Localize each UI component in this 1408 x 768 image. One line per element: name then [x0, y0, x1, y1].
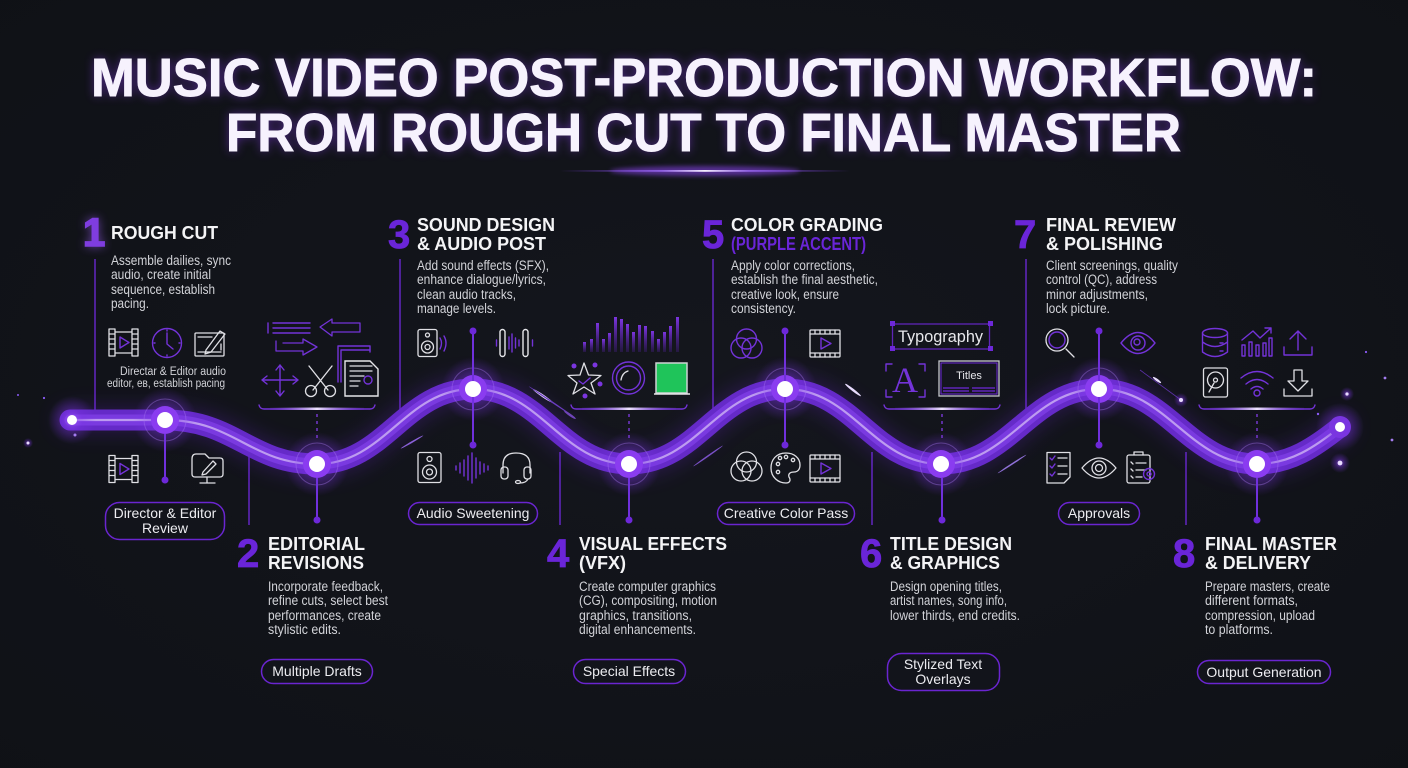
- heading: [579, 534, 727, 573]
- label pill: [408, 502, 538, 524]
- icon: lens ring: [612, 362, 644, 394]
- icon shelf: [259, 405, 375, 410]
- description: compression, upload: [1205, 608, 1315, 623]
- description: pacing.: [111, 296, 149, 311]
- step number 8: 8: [1173, 532, 1195, 576]
- panel: step 1 rough cut: [83, 211, 231, 540]
- icon: folder on monitor: [192, 454, 223, 483]
- icon caption: editor, eв, establish pacing: [107, 378, 225, 390]
- title: FROM ROUGH CUT TO FINAL MASTER: [226, 103, 1181, 163]
- label pill: Multiple Drafts: [272, 663, 362, 679]
- icon: film lower: [810, 455, 840, 482]
- step number 4: 4: [547, 532, 570, 576]
- timeline node 5: [753, 328, 817, 448]
- heading: & AUDIO POST: [417, 234, 546, 254]
- description: performances, create: [268, 608, 381, 623]
- winding timeline path: [70, 389, 1340, 464]
- description: Client screenings, quality: [1046, 258, 1178, 273]
- icon: green screen: [654, 363, 690, 394]
- path start point: [48, 396, 96, 444]
- icon: star: [568, 362, 602, 398]
- icon: wifi: [1241, 372, 1273, 396]
- dotted connector: [941, 414, 943, 440]
- description: refine cuts, select best: [268, 593, 388, 608]
- timeline node 8: [1225, 432, 1289, 524]
- heading: [1046, 215, 1176, 254]
- dotted connector: [1256, 414, 1258, 440]
- heading: COLOR GRADING: [731, 215, 883, 235]
- icon: speaker lower: [418, 452, 441, 482]
- description: [890, 579, 1020, 623]
- description: Assemble dailies, sync: [111, 253, 231, 268]
- description: digital enhancements.: [579, 622, 696, 637]
- label pill: [888, 654, 1000, 690]
- panel: step 3 sound design: [388, 213, 555, 524]
- label pill: Output Generation: [1206, 664, 1322, 680]
- description: different formats,: [1205, 593, 1298, 608]
- icon: growth chart: [1242, 328, 1272, 356]
- icon: waveform upper: [496, 330, 532, 356]
- icon: film strip lower: [109, 456, 138, 482]
- panel: step 8 final master: [1173, 432, 1337, 684]
- icon: download: [1284, 370, 1312, 396]
- timeline node 7: [1067, 328, 1131, 448]
- description: minor adjustments,: [1046, 287, 1148, 302]
- description: Prepare masters, create: [1205, 579, 1330, 594]
- icon: sound wave: [456, 453, 488, 483]
- icon: checklist: [1047, 452, 1070, 483]
- heading: [268, 534, 365, 573]
- icon: clipboard: [1127, 452, 1154, 483]
- description: [579, 579, 717, 637]
- step number 7: 7: [1014, 213, 1036, 257]
- heading: (PURPLE ACCENT): [731, 234, 866, 254]
- heading: SOUND DESIGN: [417, 215, 555, 235]
- description: [268, 579, 388, 637]
- label pill: Creative Color Pass: [724, 505, 848, 521]
- label pill: [718, 502, 854, 524]
- label pill: Director & Editor: [114, 505, 217, 521]
- description: stylistic edits.: [268, 622, 341, 637]
- heading: & POLISHING: [1046, 234, 1163, 254]
- icon: eye white: [1082, 458, 1116, 478]
- panel: step 5 color grading: [702, 213, 883, 524]
- description: establish the final aesthetic,: [731, 272, 878, 287]
- icon: titles card: Titles: [956, 370, 982, 382]
- sparkles: [17, 351, 1393, 474]
- panel: step 4 icons: [568, 317, 690, 440]
- connector lines from steps to the path: [95, 259, 1186, 525]
- heading: (VFX): [579, 553, 626, 573]
- icon: upload: [1284, 331, 1312, 355]
- timeline node 3: [441, 328, 505, 448]
- icon caption: Directar & Editor audio: [120, 366, 226, 378]
- description: Apply color corrections,: [731, 258, 855, 273]
- label pill: Special Effects: [583, 663, 675, 679]
- description: enhance dialogue/lyrics,: [417, 272, 546, 287]
- label pill: Overlays: [915, 671, 971, 687]
- title: MUSIC VIDEO POST-PRODUCTION WORKFLOW:: [91, 48, 1317, 108]
- heading: FINAL REVIEW: [1046, 215, 1176, 235]
- icon: timeline arrows: [262, 319, 360, 396]
- icon: typography box: Typography: [898, 327, 983, 346]
- description: to platforms.: [1205, 622, 1273, 637]
- icon: color wheels purple: [731, 329, 762, 358]
- label pill: Stylized Text: [904, 656, 982, 672]
- heading: [890, 534, 1012, 573]
- description: [111, 253, 231, 311]
- step number 1: 1: [83, 211, 105, 255]
- title: MUSIC VIDEO POST-PRODUCTION WORKFLOW:: [91, 48, 1317, 108]
- description: Create computer graphics: [579, 579, 716, 594]
- description: Add sound effects (SFX),: [417, 258, 549, 273]
- label pill: Approvals: [1068, 505, 1130, 521]
- icon shelf: [884, 405, 1000, 410]
- heading: [731, 215, 883, 254]
- description: [1046, 258, 1178, 316]
- icon: tablet and pen: [195, 331, 225, 356]
- icon: clock: [152, 328, 182, 358]
- heading: TITLE DESIGN: [890, 534, 1012, 554]
- panel: step 8 icons: [1199, 328, 1315, 440]
- heading: & GRAPHICS: [890, 553, 1000, 573]
- step number 1: 1: [83, 211, 105, 255]
- description: [417, 258, 549, 316]
- label pill: [1198, 660, 1330, 684]
- label pill: [574, 660, 686, 684]
- icon: film strip: [109, 329, 138, 356]
- step number 5: 5: [702, 213, 724, 257]
- label pill: [262, 660, 372, 684]
- panel: step 4 visual effects: [547, 432, 727, 684]
- heading: FINAL MASTER: [1205, 534, 1337, 554]
- timeline node 4: [597, 432, 661, 524]
- panel: step 2 editorial revisions: [237, 432, 388, 684]
- icon shelf: [571, 405, 687, 410]
- label pill: Audio Sweetening: [417, 505, 529, 521]
- description: control (QC), address: [1046, 272, 1157, 287]
- panel: step 7 final review: [1014, 213, 1178, 524]
- icon: hard drive: [1204, 368, 1228, 397]
- description: Incorporate feedback,: [268, 579, 383, 594]
- icon: headphones: [501, 453, 531, 484]
- icon: film upper: [810, 330, 840, 357]
- timeline node 1: [133, 388, 197, 484]
- icon: scissors: [306, 366, 336, 396]
- panel: step 6 title design: [860, 432, 1020, 690]
- description: [731, 258, 878, 316]
- panel: step 2 icons: [259, 319, 378, 440]
- timeline node 2: [285, 432, 349, 524]
- label pill: [1058, 502, 1140, 524]
- icon: database: [1202, 328, 1228, 356]
- description: sequence, establish: [111, 282, 215, 297]
- heading: VISUAL EFFECTS: [579, 534, 727, 554]
- panel: step 6 icons: [884, 321, 1000, 440]
- timeline node 6: [909, 432, 973, 524]
- description: artist names, song info,: [890, 593, 1007, 608]
- description: Design opening titles,: [890, 579, 1002, 594]
- description: (CG), compositing, motion: [579, 593, 717, 608]
- dotted connector: [628, 414, 630, 440]
- heading: ROUGH CUT: [111, 223, 218, 243]
- description: creative look, ensure: [731, 287, 839, 302]
- heading: EDITORIAL: [268, 534, 365, 554]
- step number 3: 3: [388, 213, 410, 257]
- description: audio, create initial: [111, 267, 211, 282]
- step number 6: 6: [860, 532, 882, 576]
- icon: letter A in frame: A: [892, 360, 918, 400]
- icon: magnifier: [1046, 329, 1074, 357]
- heading: & DELIVERY: [1205, 553, 1311, 573]
- title underline glow: [560, 166, 850, 176]
- icon: speaker with sound: [418, 330, 446, 356]
- description: manage levels.: [417, 301, 496, 316]
- description: clean audio tracks,: [417, 287, 516, 302]
- heading: [1205, 534, 1337, 573]
- icon shelf: [1199, 405, 1315, 410]
- label pill: [106, 502, 224, 540]
- icon: eye purple: [1121, 332, 1155, 354]
- icon caption: [107, 366, 226, 390]
- description: consistency.: [731, 301, 796, 316]
- icon: documents: [338, 346, 378, 396]
- title: [91, 48, 1317, 163]
- description: [1205, 579, 1330, 637]
- icon: color wheels white: [731, 452, 762, 481]
- heading: [417, 215, 555, 254]
- heading: REVISIONS: [268, 553, 364, 573]
- description: graphics, transitions,: [579, 608, 692, 623]
- icon: palette: [771, 453, 800, 483]
- description: lock picture.: [1046, 301, 1110, 316]
- label pill: Review: [142, 520, 189, 536]
- path end point: [1316, 403, 1364, 451]
- title: FROM ROUGH CUT TO FINAL MASTER: [226, 103, 1181, 163]
- description: lower thirds, end credits.: [890, 608, 1020, 623]
- dotted connector: [316, 414, 318, 440]
- step number 2: 2: [237, 532, 259, 576]
- icon: equalizer bars: [583, 317, 679, 352]
